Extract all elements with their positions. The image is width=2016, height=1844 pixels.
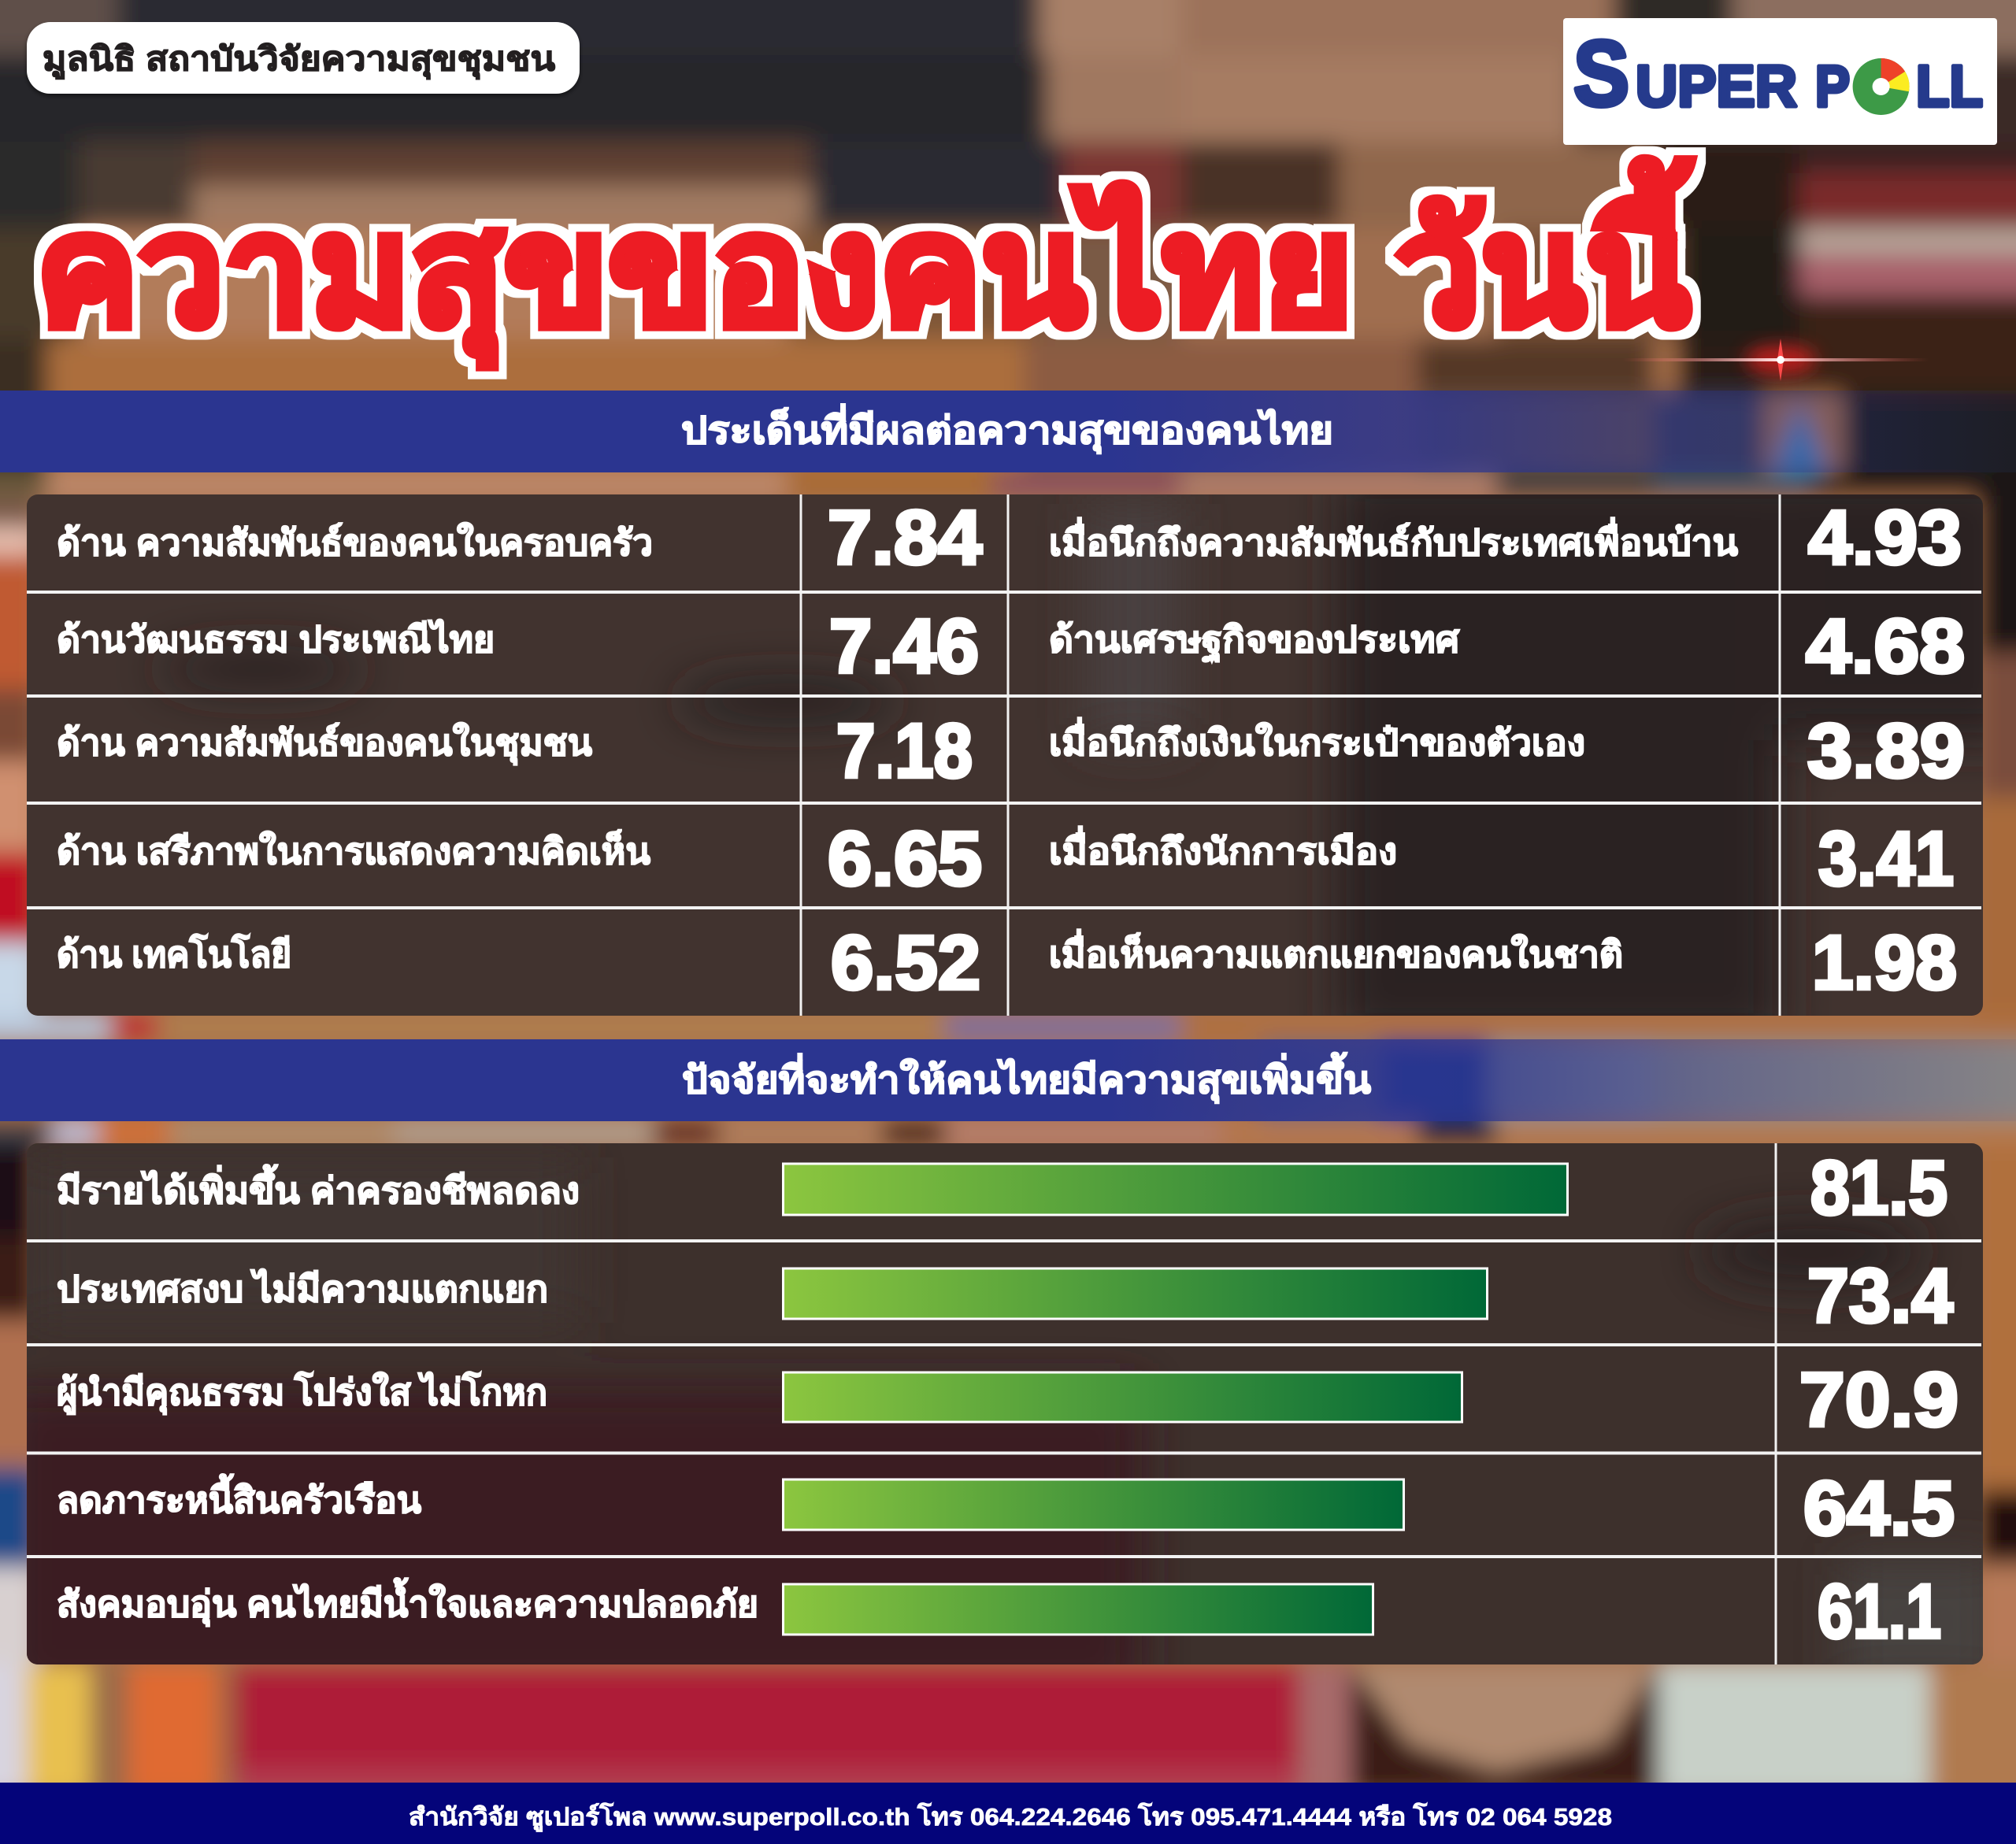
footer: contact bar: สำนักวิจัย ซูเปอร์โพล www.superpoll.co.th โทร 064.224.2646 โทร 095.471.4444 หรือ โทร 02 064 5928 bbox=[409, 1802, 1612, 1832]
right values: 3.41 bbox=[1818, 816, 1954, 902]
section header: issues affecting happiness bbox=[0, 391, 2016, 472]
right labels: เมื่อนึกถึงความสัมพันธ์กับประเทศเพื่อนบ้าน bbox=[1049, 517, 1739, 563]
panel: happiness factors bar chart bbox=[0, 1143, 2000, 1701]
factor values: 61.1 bbox=[1818, 1568, 1941, 1654]
logo: SUPER POLL bbox=[1563, 18, 1997, 145]
factor labels: ลดภาระหนี้สินครัวเรือน bbox=[57, 1473, 422, 1520]
left values: 7.84 bbox=[828, 494, 982, 580]
left labels bbox=[57, 521, 653, 975]
row dividers bbox=[27, 1241, 1981, 1557]
logo: SUPER POLL: S bbox=[1573, 22, 1629, 126]
left values: 7.46 bbox=[829, 603, 979, 689]
badge: foundation name bbox=[27, 22, 580, 94]
right labels: เมื่อนึกถึงเงินในกระเป๋าของตัวเอง bbox=[1049, 717, 1585, 763]
factor labels bbox=[57, 1164, 758, 1627]
green bars bbox=[783, 1164, 1567, 1635]
right labels: ด้านเศรษฐกิจของประเทศ bbox=[1049, 619, 1460, 663]
factor labels: ผู้นำมีคุณธรรม โปร่งใส ไม่โกหก bbox=[57, 1371, 547, 1415]
factor values: 73.4 bbox=[1807, 1253, 1953, 1339]
logo: SUPER POLL: P bbox=[1815, 54, 1850, 119]
factor labels: ประเทศสงบ ไม่มีความแตกแยก bbox=[57, 1268, 548, 1309]
right values: 1.98 bbox=[1812, 920, 1957, 1005]
footer: contact bar bbox=[0, 1783, 2016, 1844]
badge: foundation name: มูลนิธิ สถาบันวิจัยความสุขชุมชน bbox=[43, 40, 555, 80]
factor values: 64.5 bbox=[1803, 1465, 1955, 1551]
left labels: ด้าน เทคโนโลยี bbox=[57, 933, 291, 975]
section header: factors that would raise happiness: ปัจจัยที่จะทำให้คนไทยมีความสุขเพิ่มขึ้น bbox=[682, 1052, 1371, 1104]
left values bbox=[828, 494, 982, 1005]
section header: factors that would raise happiness bbox=[0, 1039, 2016, 1121]
factor labels: สังคมอบอุ่น คนไทยมีน้ำใจและความปลอดภัย bbox=[57, 1577, 758, 1627]
section header: issues affecting happiness: ประเด็นที่มีผลต่อความสุขของคนไทย bbox=[681, 403, 1333, 454]
lens flare bbox=[1622, 339, 1929, 381]
left values: 6.65 bbox=[828, 816, 982, 902]
right labels: เมื่อเห็นความแตกแยกของคนในชาติ bbox=[1049, 929, 1623, 975]
left values: 7.18 bbox=[836, 708, 973, 794]
factor values: 70.9 bbox=[1799, 1357, 1959, 1442]
right values: 4.93 bbox=[1808, 494, 1962, 580]
factor values: 81.5 bbox=[1810, 1145, 1947, 1231]
row dividers bbox=[27, 592, 1981, 908]
logo: SUPER POLL: UPER bbox=[1636, 54, 1797, 119]
right labels bbox=[1049, 517, 1739, 975]
left labels: ด้าน ความสัมพันธ์ของคนในชุมชน bbox=[57, 721, 593, 765]
right values: 3.89 bbox=[1807, 708, 1965, 794]
panel: happiness scores table bbox=[27, 472, 2016, 1039]
factor labels: มีรายได้เพิ่มขึ้น ค่าครองชีพลดลง bbox=[57, 1164, 580, 1211]
left labels: ด้าน ความสัมพันธ์ของคนในครอบครัว bbox=[57, 521, 653, 563]
left labels: ด้าน เสรีภาพในการแสดงความคิดเห็น bbox=[57, 829, 651, 872]
title: ความสุขของคนไทย วันนี้ bbox=[36, 158, 1693, 368]
right labels: เมื่อนึกถึงนักการเมือง bbox=[1049, 826, 1397, 872]
right values: 4.68 bbox=[1806, 603, 1965, 689]
left labels: ด้านวัฒนธรรม ประเพณีไทย bbox=[57, 619, 495, 660]
factor values bbox=[1799, 1145, 1959, 1654]
logo: SUPER POLL: LL bbox=[1916, 54, 1983, 119]
left values: 6.52 bbox=[831, 920, 980, 1005]
right values bbox=[1806, 494, 1965, 1005]
